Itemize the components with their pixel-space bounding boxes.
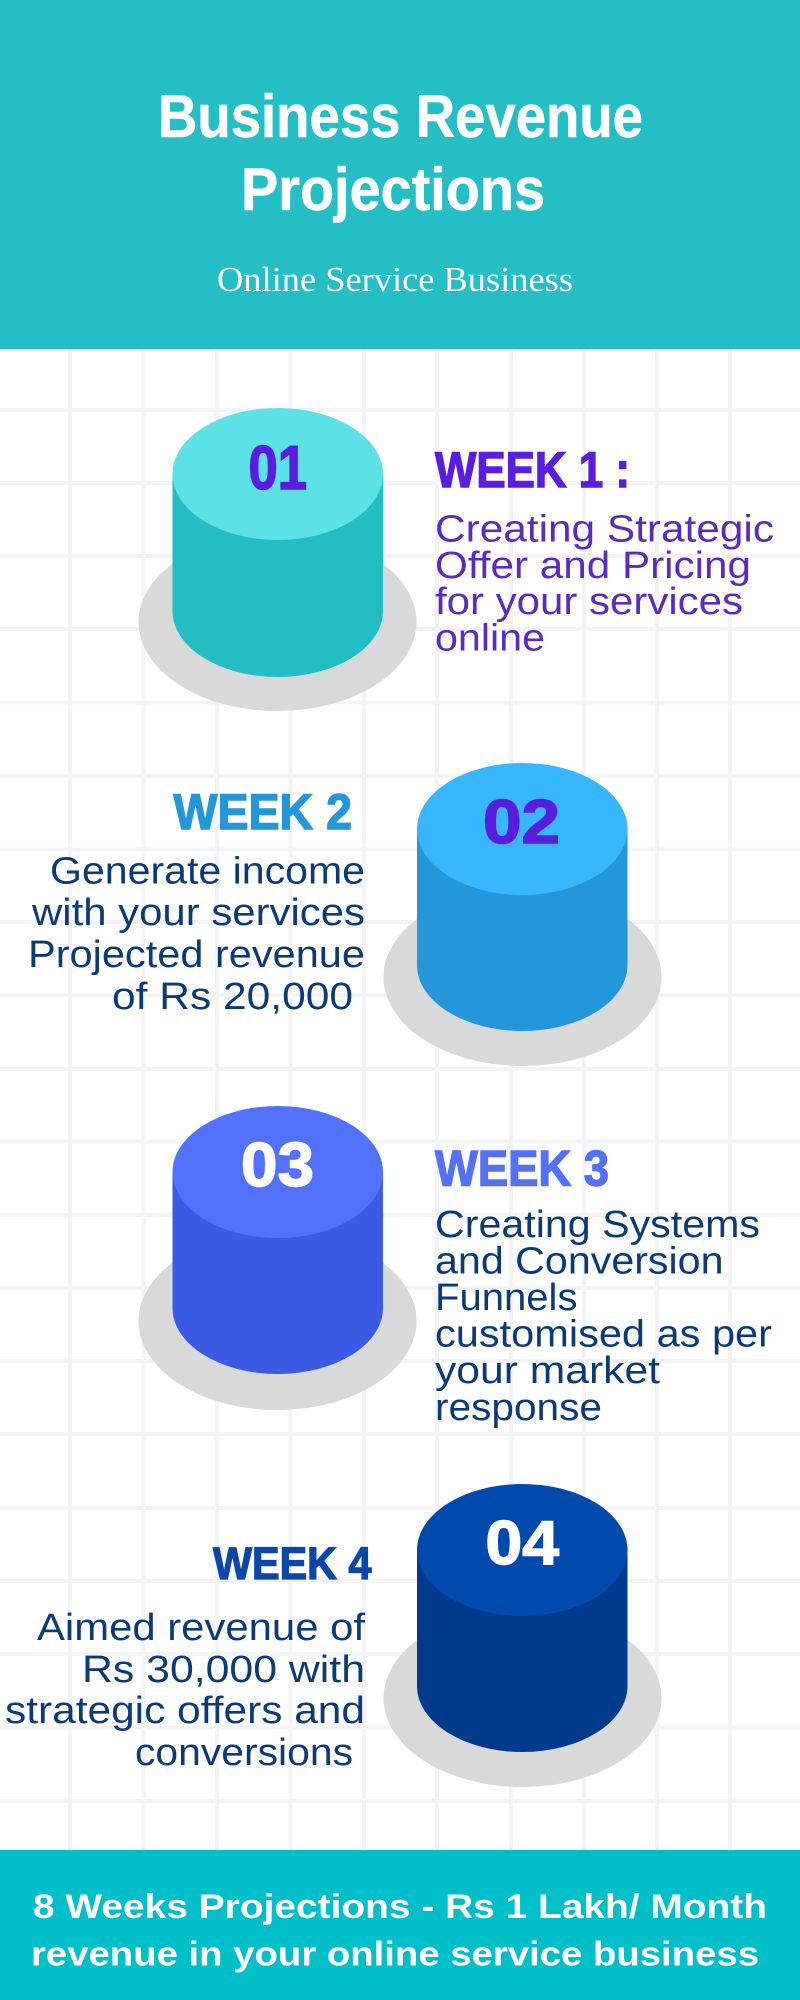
text block: week 2 description xyxy=(28,850,365,1018)
text block: week 1 description xyxy=(435,508,774,660)
panel: week 4 xyxy=(5,1484,662,1787)
text block: week 3 description: Creating Systems xyxy=(435,1204,760,1246)
panel: week 3 xyxy=(138,1106,772,1429)
text block: week 2 description: of Rs 20,000 xyxy=(112,976,353,1018)
icon: cylinder 01 xyxy=(138,408,416,711)
title xyxy=(158,83,643,223)
footer text: 8 Weeks Projections - Rs 1 Lakh/ Month xyxy=(33,1888,767,1926)
title: Business Revenue xyxy=(158,83,643,150)
text block: week 1 description: Creating Strategic xyxy=(435,508,774,550)
heading: week 4: WEEK 4 xyxy=(213,1538,372,1589)
icon: cylinder 04: 04 xyxy=(486,1509,560,1578)
text block: week 3 description: Funnels xyxy=(435,1277,578,1319)
text block: week 2 description: Generate income xyxy=(50,850,365,892)
text block: week 4 description: strategic offers and xyxy=(5,1690,365,1732)
icon: cylinder 04 xyxy=(384,1484,662,1787)
text block: week 3 description: and Conversion xyxy=(435,1240,724,1282)
text block: week 3 description: response xyxy=(435,1387,602,1429)
text block: week 3 description: customised as per xyxy=(435,1314,772,1356)
icon: cylinder 01: 01 xyxy=(248,434,307,503)
text block: week 4 description xyxy=(5,1607,365,1774)
panel: week 1 xyxy=(138,408,774,711)
panel: week 2 xyxy=(28,763,662,1066)
text block: week 2 description: Projected revenue xyxy=(28,934,365,976)
footer text xyxy=(31,1888,767,1974)
panel: header xyxy=(0,0,800,349)
icon: cylinder 02 xyxy=(384,763,662,1066)
text block: week 3 description xyxy=(435,1204,772,1429)
heading: week 2: WEEK 2 xyxy=(174,784,352,840)
heading: week 3: WEEK 3 xyxy=(435,1140,609,1196)
icon: cylinder 02: 02 xyxy=(483,788,560,857)
text block: week 2 description: with your services xyxy=(31,892,365,934)
text block: week 4 description: Rs 30,000 with xyxy=(82,1649,365,1691)
footer text: revenue in your online service business xyxy=(31,1936,759,1974)
icon: cylinder 03 xyxy=(138,1106,416,1410)
panel: footer callout xyxy=(0,1850,800,2000)
title: Projections xyxy=(241,156,545,223)
icon: cylinder 03: 03 xyxy=(241,1131,314,1200)
text block: week 1 description: for your services xyxy=(435,581,743,623)
text block: week 1 description: Offer and Pricing xyxy=(435,545,751,587)
text block: week 3 description: your market xyxy=(435,1350,660,1392)
text block: week 4 description: conversions xyxy=(135,1732,353,1774)
text block: week 4 description: Aimed revenue of xyxy=(37,1607,365,1649)
subtitle: Online Service Business xyxy=(217,260,573,299)
heading: week 1: WEEK 1 : xyxy=(435,442,630,498)
text block: week 1 description: online xyxy=(435,618,545,660)
